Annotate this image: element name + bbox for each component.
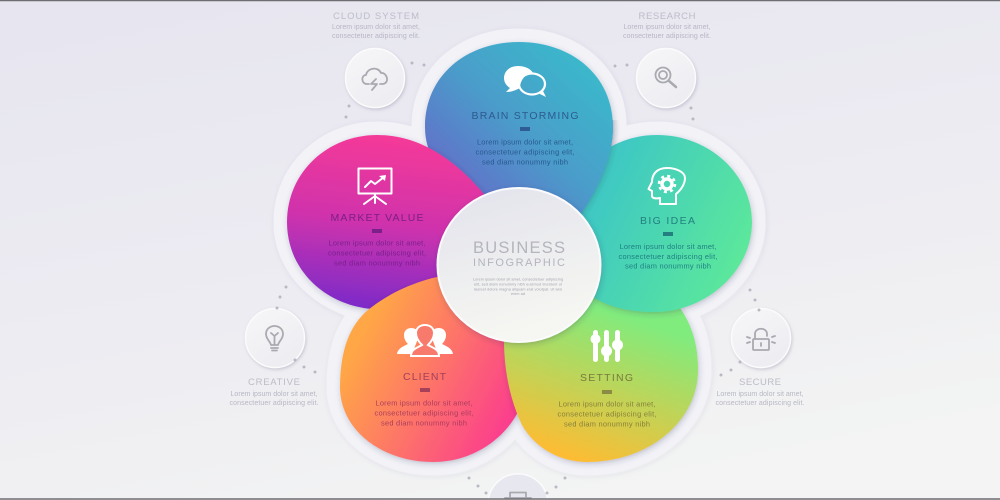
text (332, 24, 420, 40)
text (716, 391, 805, 407)
center circle (438, 188, 600, 342)
body text: Lorem ipsum dolor sit amet, (328, 238, 426, 248)
title: BUSINESS (473, 239, 565, 257)
text (623, 24, 711, 40)
panel: brain storming (425, 42, 613, 260)
icon: chat bubbles (504, 66, 546, 97)
dash (372, 229, 382, 233)
callout: cloud system (332, 11, 420, 108)
body text (476, 138, 574, 166)
dash (520, 127, 530, 131)
text: consectetuer adipiscing elit. (332, 33, 420, 40)
icon: light bulb (266, 326, 283, 350)
dash (602, 390, 612, 394)
panel: setting (504, 270, 698, 462)
text: consectetuer adipiscing elit. (716, 400, 805, 407)
heading: BIG IDEA (640, 215, 695, 227)
icon: head with gear (648, 168, 685, 204)
body text: Lorem ipsum dolor sit amet, (376, 398, 472, 408)
heading: SETTING (580, 372, 633, 384)
icon: group of people (397, 325, 453, 356)
text (230, 391, 319, 407)
icon: open padlock (747, 329, 775, 350)
description: laoreet dolore magna aliquam erat volutpat. Ut wisi (474, 288, 562, 292)
text: Lorem ipsum dolor sit amet, (230, 391, 318, 398)
body text: consectetuer adipiscing elit, (558, 410, 656, 418)
callout: secure (716, 308, 805, 407)
heading: RESEARCH (638, 11, 696, 22)
body text: sed diam nonummy nibh (381, 418, 467, 428)
panel: market value (287, 135, 520, 309)
body text: consectetuer adipiscing elit, (618, 252, 718, 261)
text: Lorem ipsum dolor sit amet, (332, 24, 420, 31)
callout: creative (230, 308, 319, 407)
description: Lorem ipsum dolor sit amet, consectetuer adipiscing (473, 278, 563, 282)
heading: CLIENT (403, 371, 447, 383)
heading: CREATIVE (248, 377, 300, 388)
body text: sed diam nonummy nibh (482, 158, 568, 166)
heading: CLOUD SYSTEM (333, 11, 419, 22)
body text: consectetuer adipiscing elit, (476, 148, 574, 156)
callout: research (623, 11, 711, 108)
body text: sed diam nonummy nibh (625, 262, 711, 270)
panel: big idea (540, 135, 752, 312)
body text (618, 242, 718, 270)
body text: consectetuer adipiscing elit, (374, 408, 474, 418)
panel: client (340, 277, 521, 462)
dash (420, 388, 430, 392)
body text (374, 398, 474, 428)
description: elit, sed diam nonummy nibh euismod tincidunt ut (474, 282, 562, 286)
body text: Lorem ipsum dolor sit amet, (477, 138, 573, 146)
text: Lorem ipsum dolor sit amet, (624, 24, 711, 31)
body text: sed diam nonummy nibh (334, 258, 420, 268)
icon: presentation board (358, 168, 392, 204)
body text: consectetuer adipiscing elit, (328, 248, 426, 258)
body text (328, 238, 426, 268)
description: enim ad (511, 292, 525, 296)
text: Lorem ipsum dolor sit amet, (716, 391, 804, 398)
heading: BRAIN STORMING (472, 110, 578, 122)
body text: sed diam nonummy nibh (564, 420, 650, 428)
halo behind petals (287, 42, 752, 462)
heading: MARKET VALUE (330, 212, 424, 224)
body text: Lorem ipsum dolor sit amet, (558, 400, 656, 408)
heading: SECURE (739, 377, 781, 388)
text: consectetuer adipiscing elit. (230, 400, 319, 407)
icon: storm cloud (362, 69, 387, 90)
subtitle: INFOGRAPHIC (473, 257, 565, 269)
text: consectetuer adipiscing elit. (623, 33, 711, 40)
icon: briefcase (505, 492, 531, 498)
description (473, 278, 563, 296)
icon: magnifier (656, 68, 676, 87)
dash (663, 232, 673, 236)
connector dots (276, 62, 760, 494)
body text (558, 400, 656, 428)
callout: bottom icon (488, 474, 548, 499)
body text: Lorem ipsum dolor sit amet, (620, 242, 716, 251)
icon: sliders (590, 330, 623, 362)
